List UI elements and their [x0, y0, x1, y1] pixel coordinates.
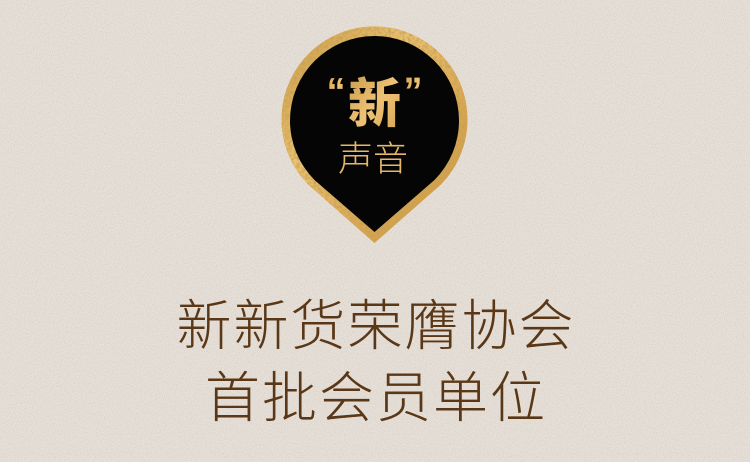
badge text: 声音: 声音 — [338, 140, 408, 179]
black pin fill — [290, 36, 459, 232]
opening quote: “ — [326, 71, 346, 113]
gold pin outline — [281, 26, 468, 243]
badge text: 新: 新 — [348, 75, 401, 134]
heading line 1: 新新货荣膺协会 — [176, 295, 576, 357]
heading line 2: 首批会员单位 — [205, 367, 547, 429]
closing quote: ” — [404, 71, 422, 113]
